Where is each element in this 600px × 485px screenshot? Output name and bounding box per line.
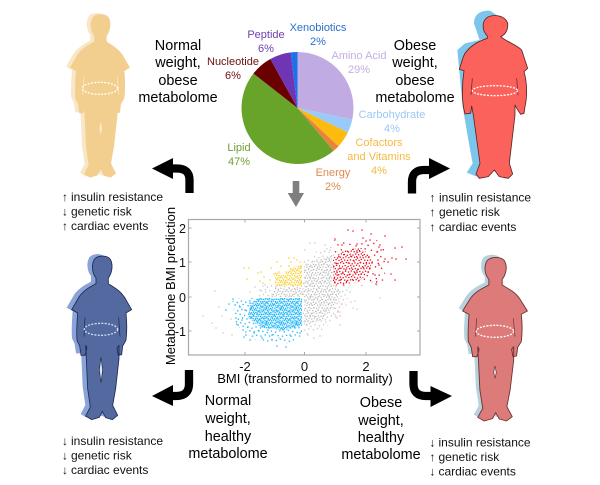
pie labels: 2% — [325, 181, 341, 193]
y axis tick labels: -1 — [175, 325, 186, 339]
y axis title: Metabolome BMI prediction — [163, 207, 178, 365]
x axis tick labels: -2 — [239, 359, 251, 374]
effects list: top left: insulin resistance — [71, 190, 163, 204]
heading: normal weight, obese metabolome: weight, — [154, 55, 201, 71]
heading: obese weight, obese metabolome: metabolome — [375, 90, 455, 106]
arrow: black, to bottom-right figure — [414, 371, 452, 407]
heading: normal weight, obese metabolome: metabolome — [138, 90, 218, 106]
heading: normal weight, healthy metabolome: metabolome — [188, 446, 268, 462]
heading: normal weight, obese metabolome: obese — [158, 73, 198, 89]
heading: obese weight, obese metabolome: Obese — [394, 38, 436, 54]
effects list: top left: ↑ — [62, 190, 68, 204]
heading: normal weight, healthy metabolome: healthy — [205, 429, 252, 445]
pie labels: 4% — [384, 123, 400, 135]
pie labels: Nucleotide — [207, 56, 259, 68]
effects list: bottom right: genetic risk — [438, 450, 500, 464]
figure: obese weight, obese metabolome (red) — [457, 11, 528, 178]
figure: normal weight, obese metabolome (yellow) — [66, 13, 130, 178]
arrow: black, to bottom-left figure — [152, 370, 189, 406]
pie labels: Carbohydrate — [359, 109, 425, 121]
effects list: bottom right: ↑ — [430, 450, 436, 464]
pie labels: Xenobiotics — [290, 22, 347, 34]
arrow: pie to scatter (grey) — [288, 181, 304, 207]
pie labels: 47% — [228, 156, 250, 168]
pink points — [334, 301, 357, 318]
effects list: bottom left: ↓ — [62, 434, 68, 448]
heading: obese weight, healthy metabolome: weight, — [357, 413, 404, 429]
effects list: top right: ↑ — [430, 220, 436, 234]
heading: normal weight, healthy metabolome: weight, — [204, 411, 251, 427]
red points — [333, 230, 406, 286]
pie labels: Peptide — [247, 29, 285, 41]
heading: obese weight, healthy metabolome: healthy — [358, 430, 405, 446]
heading: normal weight, healthy metabolome: Normal — [205, 393, 251, 409]
effects list: top left: genetic risk — [71, 204, 133, 218]
effects list: bottom left: insulin resistance — [71, 434, 163, 448]
effects list: top right: genetic risk — [439, 205, 501, 219]
heading: obese weight, healthy metabolome: metabolome — [341, 447, 421, 463]
pie labels: and Vitamins — [347, 151, 411, 163]
pie labels: Amino Acid — [331, 50, 387, 62]
pie labels: 2% — [310, 36, 326, 48]
x axis tick labels: 2 — [362, 359, 370, 374]
effects list: bottom right: insulin resistance — [438, 436, 531, 450]
y axis tick labels: 1 — [179, 256, 186, 270]
heading: obese weight, obese metabolome: obese — [395, 73, 435, 89]
pie labels: 4% — [371, 165, 387, 177]
effects list: top right: insulin resistance — [439, 190, 531, 204]
heading: obese weight, healthy metabolome: Obese — [360, 395, 402, 411]
effects list: bottom left: ↓ — [62, 448, 68, 462]
effects list: top right: cardiac events — [439, 220, 516, 234]
effects list: bottom left: ↓ — [62, 463, 68, 477]
pie labels — [207, 22, 425, 193]
y axis tick labels: 2 — [179, 222, 186, 236]
arrow: black, to top-right figure — [412, 158, 450, 194]
x axis tick labels: 0 — [301, 359, 308, 374]
pie labels: 6% — [258, 43, 274, 55]
effects list: bottom right: ↓ — [430, 436, 436, 450]
pie chart: metabolite classes — [242, 52, 353, 164]
effects list: bottom left: genetic risk — [71, 448, 133, 462]
pie labels: 29% — [348, 64, 370, 76]
arrow: black, to top-left figure — [152, 158, 190, 193]
pie labels: Energy — [316, 167, 351, 179]
effects list: top left: ↓ — [62, 204, 68, 218]
grey points — [203, 243, 380, 338]
effects list: top left: cardiac events — [71, 219, 148, 233]
x axis title: BMI (transformed to normality) — [217, 371, 393, 386]
x axis tick labels — [239, 359, 370, 374]
blue points — [226, 298, 302, 347]
figure: obese weight, healthy metabolome (pink) — [459, 255, 527, 421]
yellow points — [244, 258, 302, 286]
y axis tick labels — [175, 222, 186, 339]
y axis tick labels: 0 — [179, 291, 186, 305]
figure: normal weight, healthy metabolome (blue) — [67, 254, 132, 420]
plot frame and ticks — [188, 220, 420, 355]
scatter plot: metabolome BMI prediction vs BMI — [188, 220, 420, 355]
heading: obese weight, obese metabolome: weight, — [391, 55, 438, 71]
effects list: bottom right: ↓ — [430, 464, 436, 478]
effects list: top right: ↑ — [430, 190, 436, 204]
effects list: bottom right: cardiac events — [438, 464, 516, 478]
pie labels: Cofactors — [355, 137, 403, 149]
pie labels: 6% — [225, 70, 241, 82]
heading: normal weight, obese metabolome: Normal — [155, 38, 201, 54]
effects list: bottom left: cardiac events — [71, 463, 148, 477]
effects list: top left: ↑ — [62, 219, 68, 233]
effects list: top right: ↑ — [430, 205, 436, 219]
pie labels: Lipid — [227, 142, 251, 154]
